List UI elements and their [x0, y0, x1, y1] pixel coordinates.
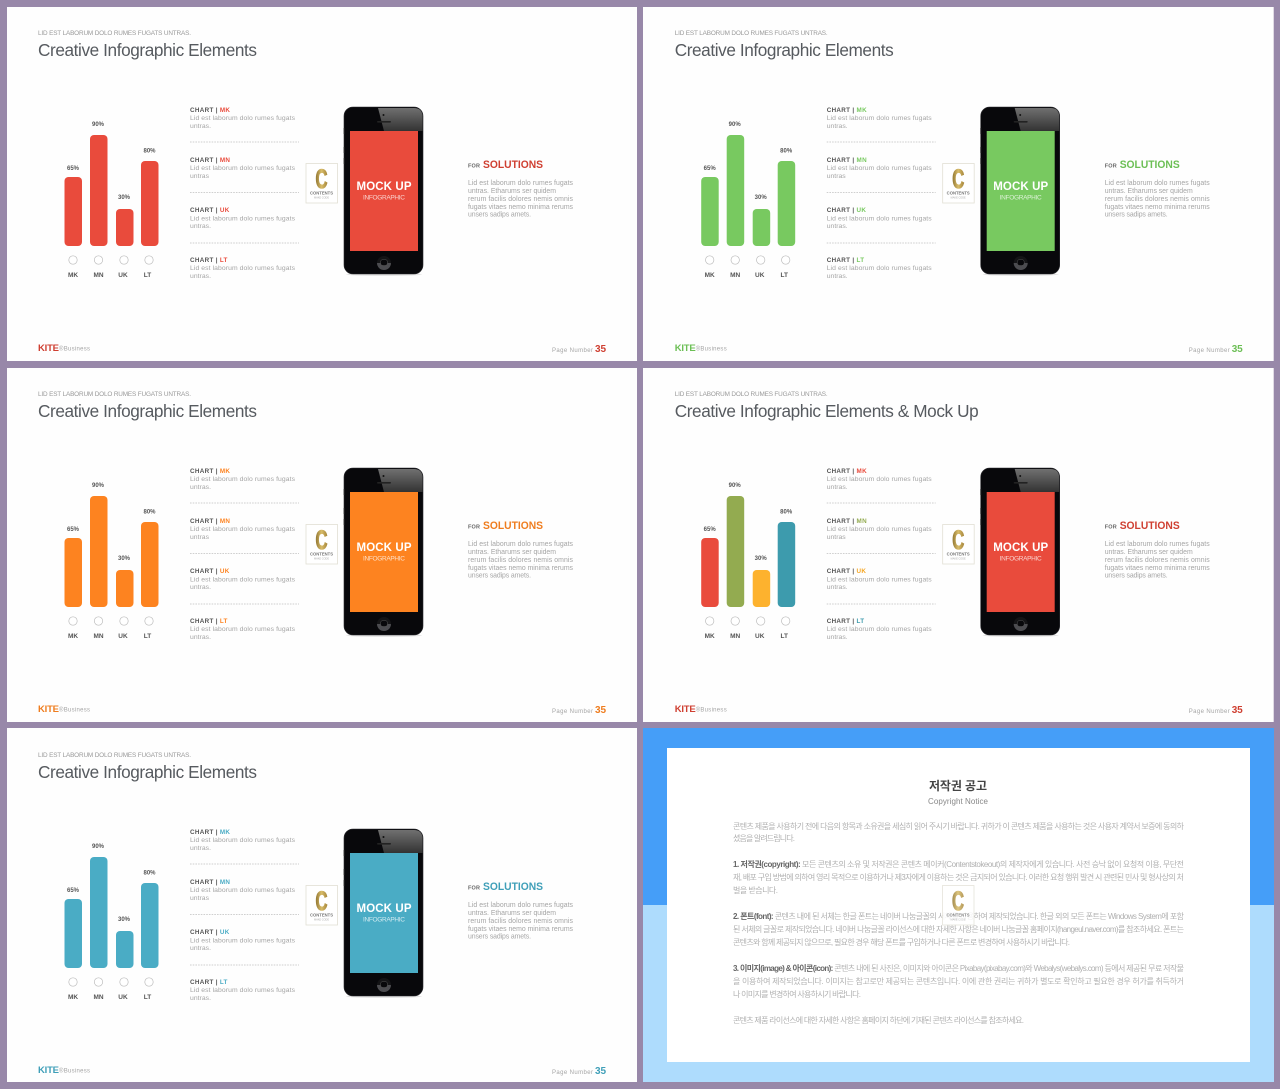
eyebrow text: LID EST LABORUM DOLO RUMES FUGATS UNTRAS. [675, 391, 828, 398]
solutions text block [1105, 159, 1210, 218]
logo badge [306, 524, 338, 564]
chart legend list: CHART | MK [827, 107, 867, 114]
page number: 35 [595, 1066, 606, 1077]
bar chart: 80% [143, 510, 156, 516]
solutions text block [1105, 520, 1210, 580]
bar chart: UK [118, 633, 128, 640]
solutions text block: untras. Etharums ser quidem [1105, 549, 1193, 556]
solutions text block: rerum facilis dolores nemis omnis [468, 196, 574, 203]
bar chart: UK [118, 272, 128, 279]
title: Creative Infographic Elements [675, 40, 894, 60]
chart legend list: untras. [190, 123, 211, 130]
closing line: 콘텐츠 제품 라이선스에 대한 자세한 사항은 홈페이지 하단에 기재된 콘텐츠 라이선스를 참조하세요. [733, 1015, 1024, 1025]
eyebrow text: LID EST LABORUM DOLO RUMES FUGATS UNTRAS. [38, 752, 191, 759]
logo badge: MAKE CODE [314, 196, 329, 200]
slide: green [643, 7, 1274, 361]
logo badge: C [952, 525, 964, 555]
bar chart: 65% [704, 166, 716, 172]
chart legend list: Lid est laborum dolo rumes fugats [827, 576, 932, 584]
chart legend list: Lid est laborum dolo rumes fugats [827, 115, 932, 122]
logo badge: CONTENTS [310, 190, 333, 196]
chart legend list: Lid est laborum dolo rumes fugats [827, 626, 932, 633]
page number: 35 [595, 705, 606, 716]
brand footer [675, 343, 727, 354]
brand footer: KITE [675, 704, 696, 715]
solutions text block: unsers sadips amets. [468, 212, 531, 218]
solutions text block: rerum facilis dolores nemis omnis [1105, 196, 1210, 203]
logo badge: CONTENTS [946, 912, 970, 918]
solutions text block: unsers sadips amets. [1105, 572, 1168, 580]
slide: orange [7, 368, 637, 722]
chart legend list: CHART | LT [190, 979, 228, 986]
solutions text block: fugats vitaes nemo minima rerums [468, 926, 574, 933]
brand footer: KITE [38, 704, 59, 715]
bar chart: 90% [92, 122, 105, 128]
solutions text block: unsers sadips amets. [1105, 212, 1168, 218]
bar chart: MK [68, 994, 78, 1001]
logo badge: C [316, 525, 328, 555]
page number: 35 [1232, 705, 1243, 716]
page number [1189, 344, 1243, 355]
page number: Page Number [552, 709, 593, 715]
section: font: 된 서체의 글꼴로 제작되었습니다. 네이버 나눔글꼴 라이선스에 대한 자세한 사항은 네이버 나눔글꼴 홈페이지(hangeul.naver.com)를 참조하세요. 폰트는 [733, 924, 1184, 934]
bar chart: 90% [92, 844, 105, 850]
title: Creative Infographic Elements & Mock Up [675, 401, 979, 421]
chart legend list: Lid est laborum dolo rumes fugats [190, 938, 296, 944]
section: image and icon: 3. 이미지(image) & 아이콘(icon): 콘텐츠 내에 된 사진은, 이미지와 아이콘은 Pixabay(pixabay.com)와 Webalys(webalys.com) 등에서 제공된 무료 저작물 [733, 963, 1184, 973]
slide: red [7, 7, 637, 361]
bar chart: 65% [67, 527, 80, 533]
chart legend list: CHART | MK [827, 468, 867, 475]
solutions text block: FOR [1105, 164, 1117, 170]
bar chart: MK [705, 272, 715, 279]
solutions text block: Lid est laborum dolo rumes fugats [1105, 180, 1210, 187]
page number [552, 1066, 606, 1077]
chart legend list: untras. [190, 945, 211, 952]
title: Creative Infographic Elements [38, 40, 257, 60]
title: Creative Infographic Elements [38, 401, 257, 421]
page number: Page Number [552, 1070, 593, 1076]
section: copyright: 1. 저작권(copyright): 모든 콘텐츠의 소유 및 저작권은 콘텐츠 메이커(Contentstokeout)의 제작자에게 있습니다. 사전 승낙 없이 요청적 이용, 무단전 [733, 859, 1184, 869]
bar chart: MN [93, 994, 104, 1001]
phone mockup: INFOGRAPHIC [363, 556, 405, 562]
solutions text block: SOLUTIONS [1120, 520, 1180, 532]
chart legend list: Lid est laborum dolo rumes fugats [190, 476, 296, 483]
bar chart: 90% [92, 483, 105, 489]
chart legend list: untras [190, 534, 210, 541]
chart legend list: Lid est laborum dolo rumes fugats [190, 576, 296, 584]
bar chart: LT [144, 272, 151, 279]
intro paragraph [733, 821, 1185, 843]
page number [1189, 705, 1243, 716]
solutions text block: Lid est laborum dolo rumes fugats [1105, 541, 1210, 548]
chart legend list: untras. [190, 845, 211, 852]
chart legend list: CHART | MK [190, 829, 230, 836]
bar chart: 65% [704, 527, 716, 533]
bar chart: LT [780, 633, 788, 640]
chart legend list: untras. [190, 484, 211, 491]
solutions text block: Lid est laborum dolo rumes fugats [468, 902, 574, 909]
phone mockup: MOCK UP [356, 181, 412, 193]
chart legend list: Lid est laborum dolo rumes fugats [190, 165, 296, 172]
solutions text block [468, 520, 574, 580]
chart legend list: CHART | UK [190, 568, 230, 575]
chart legend list: untras. [190, 995, 211, 1002]
chart legend list: untras. [190, 223, 211, 230]
bar chart: MN [93, 633, 104, 640]
solutions text block: FOR [468, 524, 480, 530]
brand footer [38, 343, 90, 354]
logo badge: CONTENTS [310, 912, 333, 918]
logo badge: MAKE CODE [950, 918, 966, 922]
brand footer: ®Business [59, 706, 90, 714]
eyebrow text: LID EST LABORUM DOLO RUMES FUGATS UNTRAS. [38, 391, 191, 398]
solutions text block: fugats vitaes nemo minima rerums [1105, 204, 1210, 211]
chart legend list: CHART | UK [827, 568, 866, 575]
solutions text block: rerum facilis dolores nemis omnis [468, 557, 574, 564]
bar chart: MN [730, 633, 741, 640]
chart legend list: untras. [827, 273, 848, 280]
logo badge [942, 886, 974, 925]
bar chart: LT [780, 272, 788, 279]
bar chart [701, 483, 795, 640]
solutions text block: untras. Etharums ser quidem [1105, 188, 1193, 195]
chart legend list: Lid est laborum dolo rumes fugats [190, 216, 296, 222]
logo badge [306, 164, 338, 203]
logo badge: MAKE CODE [951, 196, 966, 200]
section: copyright: 재, 배포 구입 방법에 의하여 영리 목적으로 이용하거나 제3자에게 이용하는 것은 금지되어 있습니다. 이러한 요청 행위 발견 시 관련된 민사 및 형사상의 처 [733, 872, 1184, 882]
chart legend list [827, 107, 936, 280]
chart legend list [190, 829, 299, 1002]
page number: Page Number [1189, 348, 1230, 354]
logo badge: C [952, 164, 964, 194]
brand footer: KITE [38, 1065, 59, 1076]
phone mockup [980, 468, 1060, 637]
section: image and icon [733, 963, 1184, 999]
brand footer: KITE [38, 343, 59, 354]
title: Creative Infographic Elements [38, 762, 257, 782]
chart legend list: untras. [827, 584, 848, 591]
solutions text block: SOLUTIONS [483, 520, 543, 532]
slide: multicolor [643, 368, 1274, 722]
eyebrow text: LID EST LABORUM DOLO RUMES FUGATS UNTRAS. [675, 30, 828, 37]
slide: teal [7, 728, 637, 1082]
logo badge: MAKE CODE [314, 918, 329, 922]
section: font [733, 911, 1185, 947]
chart legend list: Lid est laborum dolo rumes fugats [827, 216, 932, 222]
brand footer: ®Business [59, 1068, 90, 1074]
solutions text block: FOR [1105, 524, 1117, 530]
logo badge: MAKE CODE [314, 558, 329, 560]
solutions text block [468, 881, 574, 940]
chart legend list: CHART | MN [190, 157, 230, 164]
bar chart: MK [68, 272, 78, 279]
brand footer [38, 1065, 90, 1076]
chart legend list: Lid est laborum dolo rumes fugats [827, 526, 932, 533]
brand footer [38, 704, 90, 715]
brand footer: KITE [675, 343, 696, 354]
solutions text block: rerum facilis dolores nemis omnis [1105, 557, 1210, 564]
chart legend list: untras. [827, 484, 848, 491]
bar chart: LT [144, 994, 151, 1001]
solutions text block: untras. Etharums ser quidem [468, 188, 556, 195]
logo badge [943, 164, 974, 203]
phone mockup [344, 468, 423, 637]
solutions text block: SOLUTIONS [483, 159, 543, 171]
chart legend list: untras. [827, 223, 848, 230]
chart legend list: Lid est laborum dolo rumes fugats [190, 526, 296, 533]
logo badge: CONTENTS [310, 552, 333, 556]
bar chart: 80% [143, 148, 156, 154]
chart legend list: CHART | MN [827, 157, 867, 164]
bar chart: MK [705, 633, 715, 640]
solutions text block: rerum facilis dolores nemis omnis [468, 918, 574, 925]
bar chart: LT [144, 633, 151, 640]
page number [552, 705, 606, 716]
bar chart [64, 122, 158, 279]
chart legend list: Lid est laborum dolo rumes fugats [190, 626, 296, 633]
solutions text block: fugats vitaes nemo minima rerums [1105, 565, 1210, 572]
notice subtitle: Copyright Notice [928, 797, 989, 806]
chart legend list: Lid est laborum dolo rumes fugats [190, 115, 296, 122]
logo badge: MAKE CODE [951, 558, 966, 560]
bar chart: UK [755, 272, 765, 279]
phone mockup: INFOGRAPHIC [363, 194, 405, 202]
bar chart: 30% [118, 195, 131, 201]
bar chart: 80% [143, 870, 156, 876]
phone mockup: INFOGRAPHIC [1000, 556, 1042, 562]
bar chart: 30% [118, 556, 131, 562]
brand footer: ®Business [696, 706, 727, 714]
eyebrow text: LID EST LABORUM DOLO RUMES FUGATS UNTRAS. [38, 30, 191, 37]
solutions text block: SOLUTIONS [1120, 159, 1180, 171]
bar chart: 80% [780, 510, 793, 516]
chart legend list: Lid est laborum dolo rumes fugats [190, 987, 296, 994]
logo badge: C [316, 886, 328, 916]
chart legend list: Lid est laborum dolo rumes fugats [827, 476, 932, 483]
phone mockup: INFOGRAPHIC [1000, 194, 1042, 202]
bar chart: MN [730, 272, 741, 279]
bar chart: MK [68, 633, 78, 640]
chart legend list: CHART | UK [827, 207, 866, 214]
brand footer: ®Business [59, 346, 90, 352]
chart legend list: Lid est laborum dolo rumes fugats [190, 265, 296, 272]
chart legend list: Lid est laborum dolo rumes fugats [827, 165, 932, 172]
chart legend list: untras. [190, 273, 211, 280]
solutions text block: FOR [468, 164, 480, 170]
notice panel [667, 748, 1250, 1062]
chart legend list: untras [190, 895, 210, 902]
section: copyright [733, 859, 1184, 895]
bar chart [701, 122, 795, 279]
slide: copyright notice [643, 728, 1274, 1082]
chart legend list: untras [827, 534, 846, 541]
chart legend list: CHART | LT [827, 257, 864, 264]
section: font: 2. 폰트(font): 콘텐츠 내에 된 서체는 한글 폰트는 네이버 나눔글꼴의 서체를 사용하여 제작되었습니다. 한글 외의 모든 폰트는 Windows System에 포함 [733, 911, 1185, 921]
chart legend list: untras [827, 173, 846, 180]
section: font: 콘텐츠와 함께 제공되지 않으므로, 필요한 경우 해당 폰트를 구입하거나 다른 폰트로 변경하여 사용하시기 바랍니다. [733, 937, 1070, 947]
section: image and icon: 나 이미지를 변경하여 사용하시기 바랍니다. [733, 989, 861, 999]
bar chart: 30% [755, 195, 767, 201]
logo badge: C [316, 164, 328, 194]
page number: 35 [595, 344, 606, 355]
brand footer [675, 704, 727, 715]
solutions text block: unsers sadips amets. [468, 934, 531, 940]
bar chart [64, 844, 158, 1001]
solutions text block: Lid est laborum dolo rumes fugats [468, 541, 574, 548]
bar chart: 65% [67, 166, 80, 172]
chart legend list: CHART | MN [190, 879, 230, 886]
bar chart [64, 483, 158, 640]
logo badge [306, 886, 338, 925]
chart legend list: untras. [190, 634, 211, 641]
chart legend list: CHART | LT [190, 618, 228, 625]
notice title: 저작권 공고 [929, 778, 987, 793]
phone mockup [344, 107, 423, 276]
solutions text block: untras. Etharums ser quidem [468, 910, 556, 917]
chart legend list: untras. [827, 634, 848, 641]
section: image and icon: 을 이용하여 제작되었습니다. 이미지는 참고로만 제공되는 콘텐츠입니다. 이에 관한 권리는 귀하가 별도로 확인하고 필요한 경우 허가를 취득하거 [733, 976, 1184, 986]
chart legend list: untras [190, 173, 210, 180]
solutions text block: fugats vitaes nemo minima rerums [468, 565, 574, 572]
bar chart: 80% [780, 148, 793, 154]
bar chart: 30% [118, 917, 131, 923]
solutions text block: SOLUTIONS [483, 881, 543, 893]
chart legend list [190, 107, 299, 280]
bar chart: 90% [729, 122, 741, 128]
chart legend list: CHART | MN [190, 518, 230, 525]
logo badge: C [952, 886, 964, 916]
chart legend list [190, 468, 299, 641]
bar chart: MN [93, 272, 104, 279]
logo badge: CONTENTS [947, 190, 970, 196]
chart legend list: Lid est laborum dolo rumes fugats [190, 837, 296, 844]
intro paragraph: 콘텐츠 제품을 사용하기 전에 다음의 항목과 소유권을 세심히 읽어 주시기 바랍니다. 귀하가 이 콘텐츠 제품을 사용하는 것은 사용자 계약서 보증에 동의하 [733, 821, 1185, 831]
chart legend list: CHART | MK [190, 468, 230, 475]
bar chart: 65% [67, 888, 80, 894]
solutions text block: unsers sadips amets. [468, 572, 531, 580]
bar chart: 30% [755, 556, 767, 562]
page number: Page Number [1189, 709, 1230, 715]
solutions text block: fugats vitaes nemo minima rerums [468, 204, 574, 211]
intro paragraph: 셨음을 알려드립니다. [733, 833, 795, 843]
bar chart: UK [755, 633, 765, 640]
bar chart: 90% [729, 483, 741, 489]
chart legend list: Lid est laborum dolo rumes fugats [190, 887, 296, 894]
chart legend list: CHART | UK [190, 207, 230, 214]
solutions text block: Lid est laborum dolo rumes fugats [468, 180, 574, 187]
logo badge [943, 524, 974, 564]
brand footer: ®Business [696, 346, 727, 352]
solutions text block [468, 159, 574, 218]
chart legend list: CHART | LT [190, 257, 228, 264]
chart legend list: CHART | LT [827, 618, 864, 625]
logo badge: CONTENTS [947, 552, 970, 556]
chart legend list [827, 468, 936, 641]
phone mockup: MOCK UP [356, 903, 412, 915]
chart legend list: CHART | MK [190, 107, 230, 114]
solutions text block: FOR [468, 886, 480, 892]
solutions text block: untras. Etharums ser quidem [468, 549, 556, 556]
chart legend list: untras. [827, 123, 848, 130]
chart legend list: Lid est laborum dolo rumes fugats [827, 265, 932, 272]
phone mockup: MOCK UP [993, 542, 1049, 554]
phone mockup: MOCK UP [356, 542, 412, 554]
page number: 35 [1232, 344, 1243, 355]
phone mockup [980, 107, 1060, 276]
chart legend list: CHART | MN [827, 518, 867, 525]
bar chart: UK [118, 994, 128, 1001]
section: copyright: 벌을 받습니다. [733, 885, 778, 895]
phone mockup: INFOGRAPHIC [363, 916, 405, 924]
phone mockup [344, 829, 423, 998]
chart legend list: untras. [190, 584, 211, 591]
page number [552, 344, 606, 355]
page number: Page Number [552, 348, 593, 354]
phone mockup: MOCK UP [993, 181, 1049, 193]
chart legend list: CHART | UK [190, 929, 230, 936]
